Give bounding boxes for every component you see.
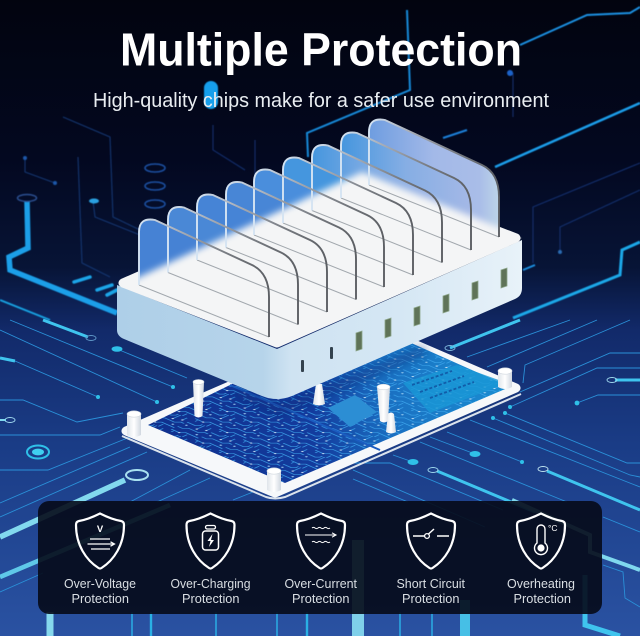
bright circuit block (403, 365, 507, 413)
label: Over-Current (284, 576, 357, 591)
circuit traces: blue lower area (0, 320, 640, 636)
icon: current shield (297, 514, 345, 568)
device shadow (236, 350, 425, 410)
top face (123, 178, 516, 343)
label line 2: Protection (72, 591, 129, 606)
exploded circuit board tray (122, 325, 521, 498)
icon: battery shield (186, 514, 234, 568)
posts (127, 368, 512, 492)
title: Multiple Protection (120, 24, 522, 76)
protection: short circuit (396, 514, 465, 606)
chip area (328, 395, 377, 427)
white surface seen through plates (120, 172, 525, 349)
subtitle: High-quality chips make for a safer use environment (93, 90, 549, 112)
label line 2: Protection (292, 591, 350, 606)
frosted plate panes (139, 120, 499, 337)
frame lower edge shading (122, 394, 521, 498)
label: Overheating (507, 576, 575, 591)
label: Over-Charging (170, 576, 250, 591)
circuit traces: dark upper area (0, 7, 640, 320)
label: Over-Voltage (64, 576, 136, 591)
label line 2: Protection (402, 591, 460, 606)
protection: over-current (284, 514, 357, 606)
white frame (126, 325, 516, 493)
label line 2: Protection (514, 591, 571, 606)
base body (117, 240, 522, 399)
protection: overheating (507, 514, 575, 606)
circuit board (148, 338, 510, 483)
plate edges (139, 120, 499, 337)
icon: switch shield (407, 514, 455, 568)
charging station (117, 120, 525, 399)
plate bases (139, 185, 499, 337)
small ports (301, 347, 333, 372)
protection: over-voltage (64, 514, 136, 606)
panel: protections (38, 501, 602, 614)
icon: voltage shield: V (97, 524, 104, 535)
icon: thermometer shield: °C (548, 523, 558, 533)
protection: over-charging (170, 514, 250, 606)
label line 2: Protection (182, 591, 240, 606)
panel background (38, 501, 602, 614)
USB ports (356, 268, 507, 351)
divider plates (120, 120, 525, 349)
label: Short Circuit (396, 576, 465, 591)
